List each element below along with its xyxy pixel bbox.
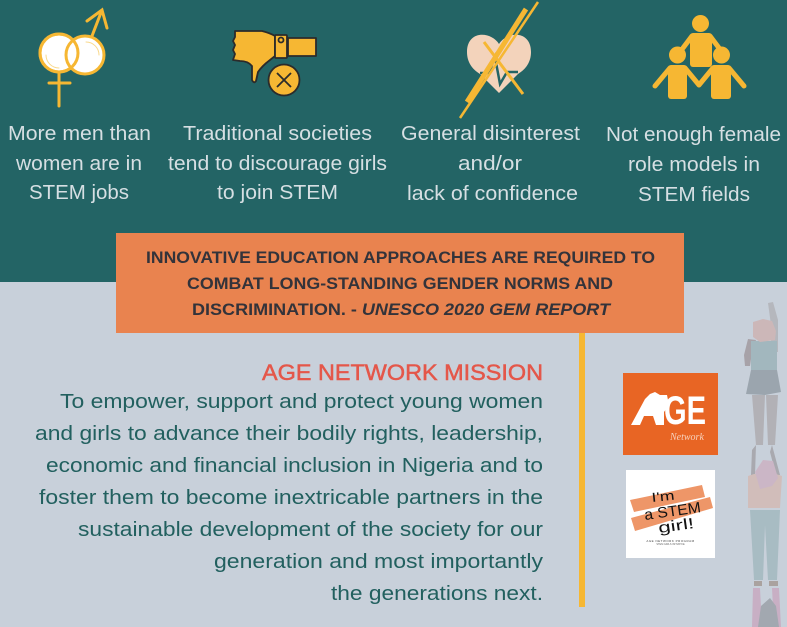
callout: UNESCO banner: COMBAT LONG-STANDING GENDER NORMS AND [187,274,613,293]
logo: I'm a STEM girl: I'm [651,488,675,505]
logo: I'm a STEM girl: STEM GIRLS INITIATIVE [656,543,685,546]
text: more men than women: More men than [8,123,151,145]
icon: thumbs down [233,31,316,96]
panel: teal header [0,0,787,282]
logo: I'm a STEM girl [626,470,715,558]
heading: AGE network mission: AGE NETWORK MISSION [262,360,543,385]
text: traditional societies: to join STEM [217,182,338,204]
divider: yellow vertical line [579,333,585,607]
text: mission statement: and girls to advance their bodily rights, leadership, [35,423,543,445]
text: traditional societies: tend to discourage girls [168,153,387,175]
callout: UNESCO banner: INNOVATIVE EDUCATION APPROACHES ARE REQUIRED TO [146,248,655,267]
text: mission statement: generation and most importantly [214,551,543,573]
text: general disinterest: General disinterest [401,123,580,145]
illustration: stacked girls silhouette [744,302,782,627]
logo: I'm a STEM girl: girl! [657,515,695,537]
text: general disinterest: and/or [458,153,522,175]
logo: I'm a STEM girl: a STEM [643,499,702,524]
text: not enough role models: role models in [628,154,760,176]
logo: AGE Network: Network [669,432,704,443]
logo: I'm a STEM girl: AGE NETWORK PROGRAM [646,539,695,543]
text: mission statement: sustainable development of the society for our [78,519,543,541]
text: general disinterest [401,123,580,205]
text: general disinterest: lack of confidence [407,183,578,205]
text: mission statement: To empower, support and protect young women [60,391,543,413]
text: more men than women [8,123,151,204]
text: traditional societies: Traditional societies [183,123,372,145]
icon: gender symbols [40,10,107,106]
text: not enough role models: Not enough female [606,124,781,146]
text: mission statement: the generations next. [331,583,543,605]
icon: three people [655,15,744,99]
text: not enough role models: STEM fields [638,184,750,206]
text: mission statement: economic and financial inclusion in Nigeria and to [46,455,543,477]
text: more men than women: STEM jobs [29,182,129,204]
text: not enough role models [606,124,781,206]
text: mission statement: foster them to become inextricable partners in the [39,487,543,509]
text: mission statement [35,391,543,605]
text: traditional societies [168,123,387,204]
callout: UNESCO banner: DISCRIMINATION. - UNESCO 2020 GEM REPORT [192,300,612,319]
text: more men than women: women are in [15,153,142,175]
callout: UNESCO banner [116,233,684,333]
icon: crossed-out heart [460,2,538,118]
logo: AGE Network: GE [664,389,706,433]
logo: AGE Network [623,373,718,455]
